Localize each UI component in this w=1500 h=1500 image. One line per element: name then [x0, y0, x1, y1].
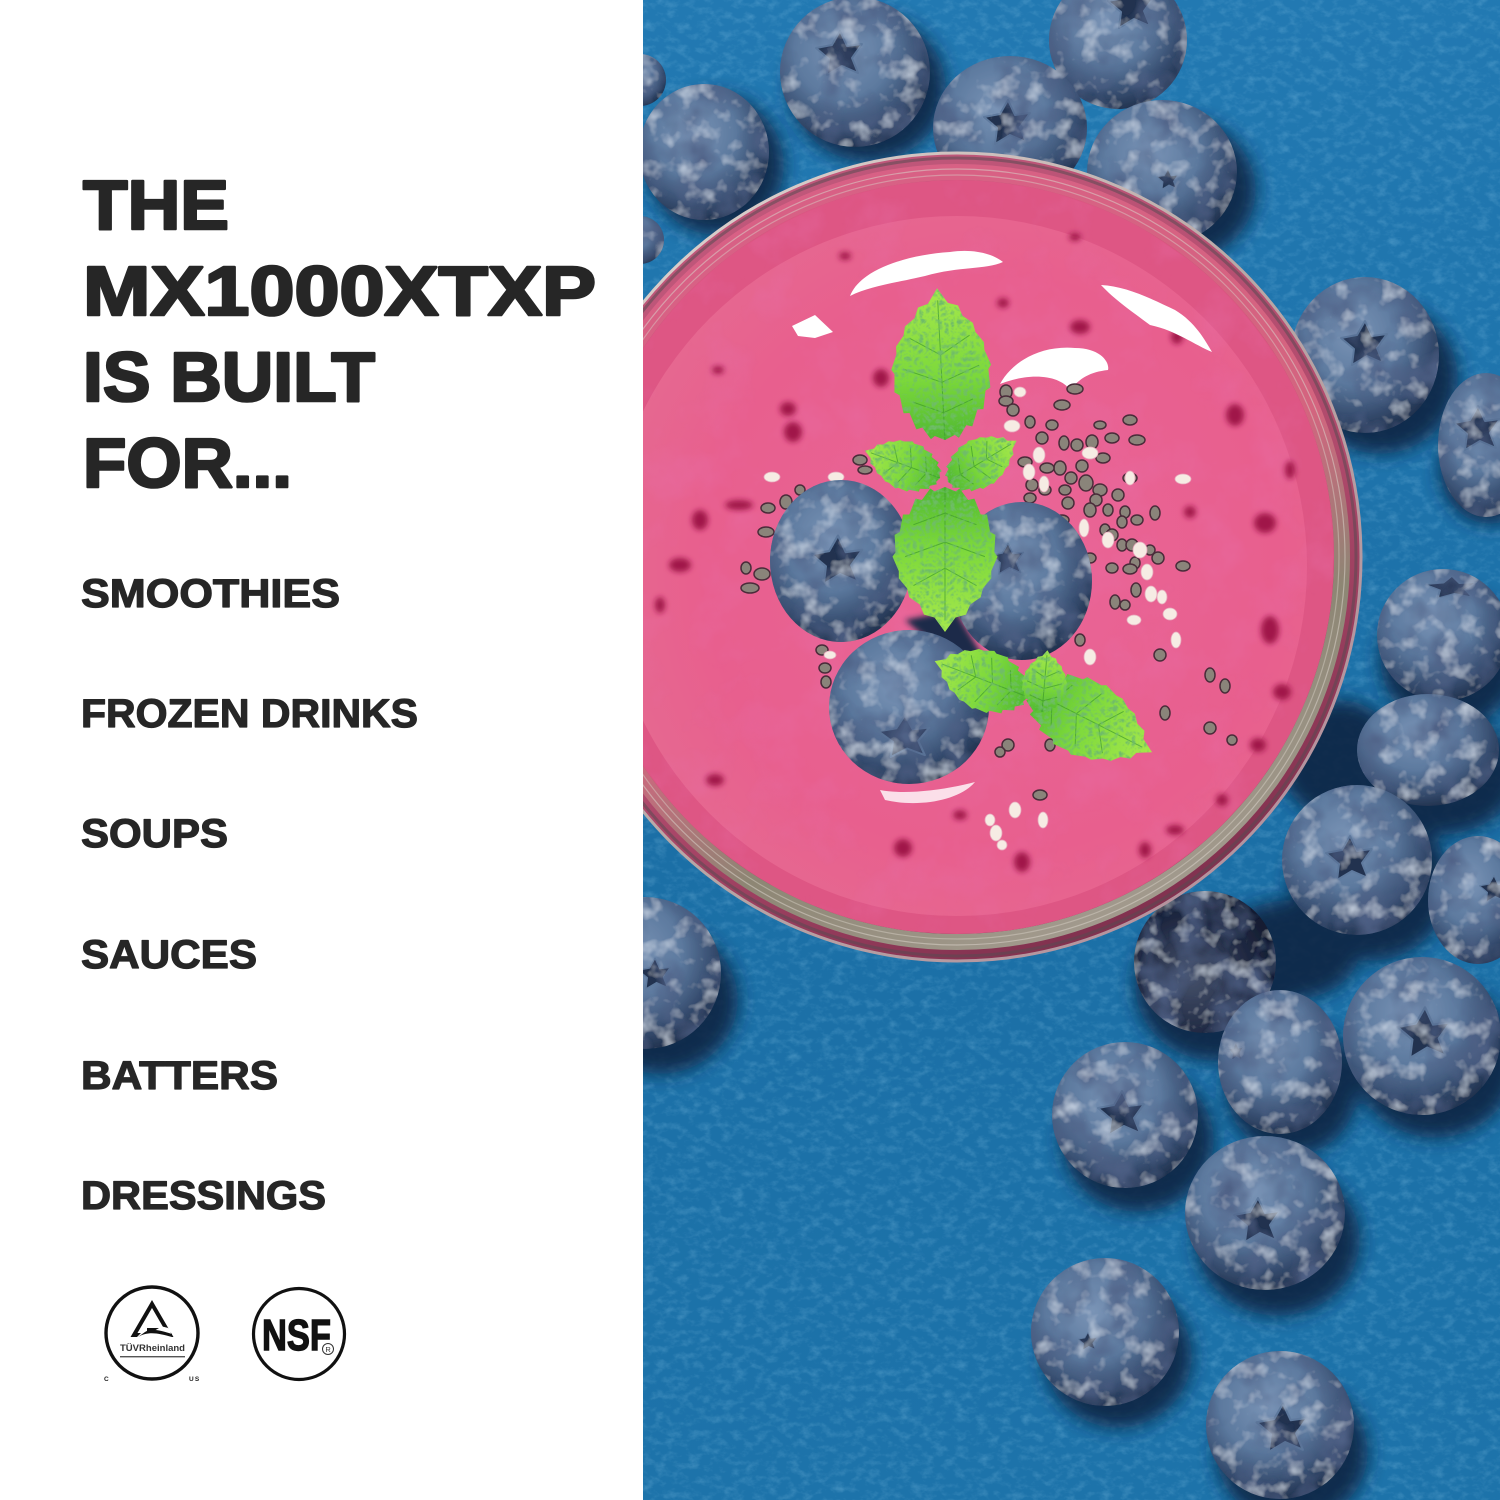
icon: NSF certification mark: [254, 1288, 344, 1380]
photo: smoothie glass and blueberries on blue surface: [553, 0, 1500, 1500]
glossy highlights: [792, 251, 1212, 803]
title: MX1000XTXP: [83, 252, 596, 330]
icon: TUV Rheinland certification mark: US: [189, 1376, 200, 1383]
blueberries around the glass: [569, 0, 1500, 1499]
title: [83, 166, 596, 502]
title: FOR...: [83, 424, 292, 502]
dark backdrop between smoothie berries: [902, 612, 985, 652]
list of uses: [81, 572, 418, 1218]
icon: TUV Rheinland certification mark: [104, 1287, 200, 1383]
item: dressings: DRESSINGS: [81, 1174, 326, 1218]
chia seeds: [741, 384, 1237, 850]
item: sauces: SAUCES: [81, 933, 257, 977]
mint leaves: [864, 288, 1152, 761]
item: batters: BATTERS: [81, 1054, 278, 1098]
smoothie surface: [580, 180, 1343, 934]
blue textured surface: [643, 0, 1500, 1500]
blueberries in the smoothie: [770, 480, 1092, 784]
title: THE: [83, 166, 229, 244]
glass rim: [643, 152, 1362, 962]
berry shadows: [582, 14, 1500, 1500]
title: IS BUILT: [83, 338, 375, 416]
icon: NSF certification mark: NSF: [262, 1311, 331, 1360]
panel: white text column: [0, 0, 643, 1500]
item: smoothies: SMOOTHIES: [81, 572, 340, 616]
icon: TUV Rheinland certification mark: C: [104, 1376, 109, 1383]
item: frozen drinks: FROZEN DRINKS: [81, 692, 418, 736]
item: soups: SOUPS: [81, 812, 228, 856]
icon: NSF certification mark: R: [325, 1345, 331, 1354]
icon: TUV Rheinland certification mark: TÜVRheinland: [120, 1343, 185, 1354]
